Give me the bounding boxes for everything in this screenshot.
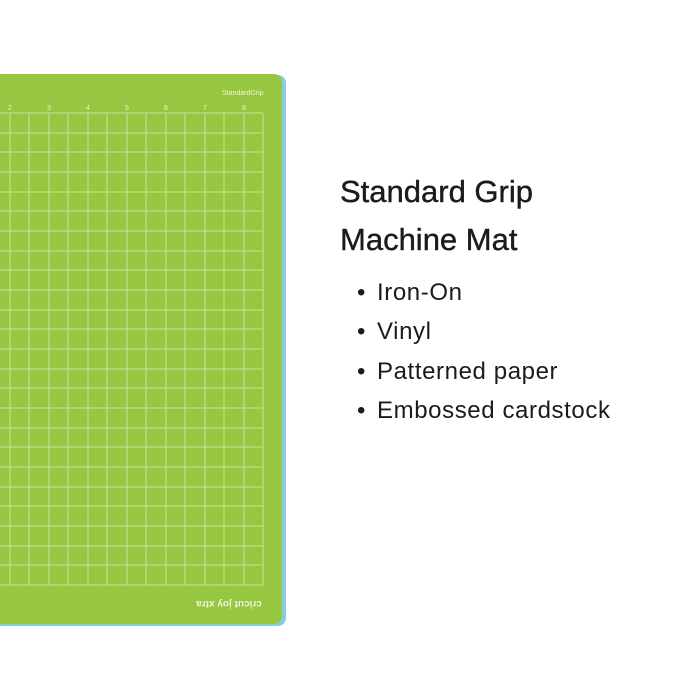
title: Standard Grip xyxy=(340,174,533,209)
text: Iron-On xyxy=(377,279,463,306)
bullet list xyxy=(357,279,611,424)
text: Vinyl xyxy=(377,318,432,345)
mat green body xyxy=(0,74,282,624)
text: Embossed cardstock xyxy=(377,397,611,424)
mat image xyxy=(0,74,286,626)
ruler numbers: 2 xyxy=(8,105,12,112)
text: • xyxy=(357,279,366,306)
cricut logo: cricut joy xtra xyxy=(196,598,262,609)
brand label: StandardGrip xyxy=(222,90,264,97)
ruler numbers xyxy=(8,105,246,112)
text: • xyxy=(357,318,366,345)
ruler numbers: 5 xyxy=(125,105,129,112)
ruler numbers: 4 xyxy=(86,105,90,112)
text: • xyxy=(357,397,366,424)
ruler numbers: 7 xyxy=(203,105,207,112)
ruler numbers: 6 xyxy=(164,105,168,112)
mat blue edge xyxy=(0,75,286,626)
title line 2: Machine Mat xyxy=(340,222,517,257)
text: Patterned paper xyxy=(377,358,558,385)
grid xyxy=(0,113,263,585)
ruler numbers: 3 xyxy=(47,105,51,112)
text: • xyxy=(357,358,366,385)
ruler numbers: 8 xyxy=(242,105,246,112)
